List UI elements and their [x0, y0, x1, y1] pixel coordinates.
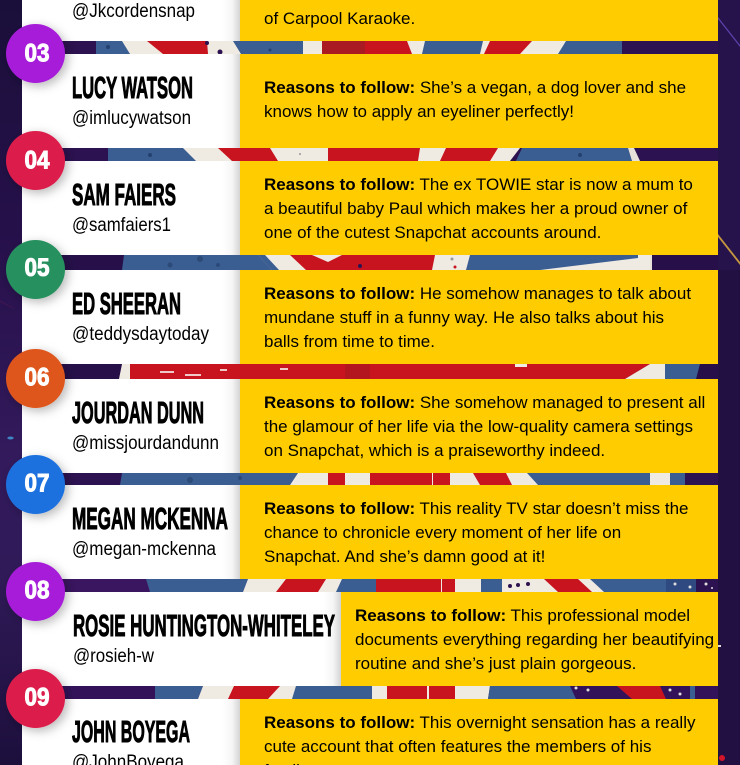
strip 1 [96, 41, 640, 54]
handle: @samfaiers1 [72, 215, 171, 236]
description: one of the cutest Snapchat accounts around. [264, 223, 601, 242]
strip 2 [108, 148, 640, 161]
number badge 07: 07 [24, 470, 50, 498]
strip 6 [146, 579, 718, 592]
description: Reasons to follow: This overnight sensation has a really [264, 713, 695, 732]
description: mundane stuff in a funny way. He also talks about his [264, 308, 664, 327]
handle: @megan-mckenna [72, 539, 216, 560]
number badge 08: 08 [24, 576, 50, 604]
row 03: Lucy Watson [22, 54, 718, 148]
handle: @missjourdandunn [72, 433, 219, 454]
description: Reasons to follow: He somehow manages to talk about [264, 284, 691, 303]
description: of Carpool Karaoke. [264, 9, 415, 28]
description: knows how to apply an eyeliner perfectly! [264, 102, 574, 121]
row 02: Jk Corden (partial) [22, 0, 718, 41]
number badge 08 [6, 562, 65, 621]
handle: @teddysdaytoday [72, 324, 209, 345]
name: ED SHEERAN [72, 287, 181, 321]
description: Reasons to follow: She’s a vegan, a dog lover and she [264, 78, 686, 97]
number badge 09 [6, 669, 65, 728]
row 06: Jourdan Dunn [22, 379, 718, 473]
description: Snapchat. And she’s damn good at it! [264, 547, 545, 566]
description: a beautiful baby Paul which makes her a proud owner of [264, 199, 688, 218]
description: Reasons to follow: The ex TOWIE star is now a mum to [264, 175, 693, 194]
name: LUCY WATSON [72, 71, 193, 105]
row 09: John Boyega [22, 699, 718, 765]
strip 5 [120, 473, 685, 485]
row 04: Sam Faiers [22, 161, 718, 255]
handle: @Jkcordensnap [72, 1, 195, 22]
number badge 06: 06 [24, 364, 50, 392]
name: MEGAN MCKENNA [72, 502, 228, 536]
name: JOURDAN DUNN [72, 396, 204, 430]
number badge 06 [6, 349, 65, 408]
description: documents everything regarding her beautifying [355, 630, 714, 649]
strip 7 [155, 686, 695, 699]
strip 4 [119, 364, 700, 379]
strip 3 [122, 255, 652, 270]
description: Reasons to follow: This professional model [355, 606, 690, 625]
name: ROSIE HUNTINGTON-WHITELEY [73, 609, 335, 643]
number badge 05: 05 [24, 254, 50, 282]
row 07: Megan McKenna [22, 485, 718, 579]
handle: @imlucywatson [72, 108, 191, 129]
description: balls from time to time. [264, 332, 435, 351]
name: SAM FAIERS [72, 178, 176, 212]
number badge 04 [6, 131, 65, 190]
row 08: Rosie Huntington-Whiteley [22, 592, 718, 686]
number badge 04: 04 [24, 146, 50, 174]
number badge 07 [6, 455, 65, 514]
description: the glamour of her life via the low-quality camera settings [264, 417, 693, 436]
description: Reasons to follow: This reality TV star doesn’t miss the [264, 499, 688, 518]
row 05: Ed Sheeran [22, 270, 718, 364]
number badge 05 [6, 240, 65, 299]
background: right edge [718, 0, 740, 765]
handle: @rosieh-w [73, 646, 154, 667]
description: cute account that often features the members of his [264, 737, 651, 756]
background: left edge [0, 0, 22, 765]
number badge 03 [6, 24, 65, 83]
description: routine and she’s just plain gorgeous. [355, 654, 636, 673]
description: on Snapchat, which is a praiseworthy indeed. [264, 441, 605, 460]
name: JOHN BOYEGA [72, 715, 190, 749]
description: Reasons to follow: She somehow managed to present all [264, 393, 705, 412]
number badge 03: 03 [24, 40, 50, 68]
description: chance to chronicle every moment of her life on [264, 523, 621, 542]
number badge 09: 09 [24, 684, 50, 712]
